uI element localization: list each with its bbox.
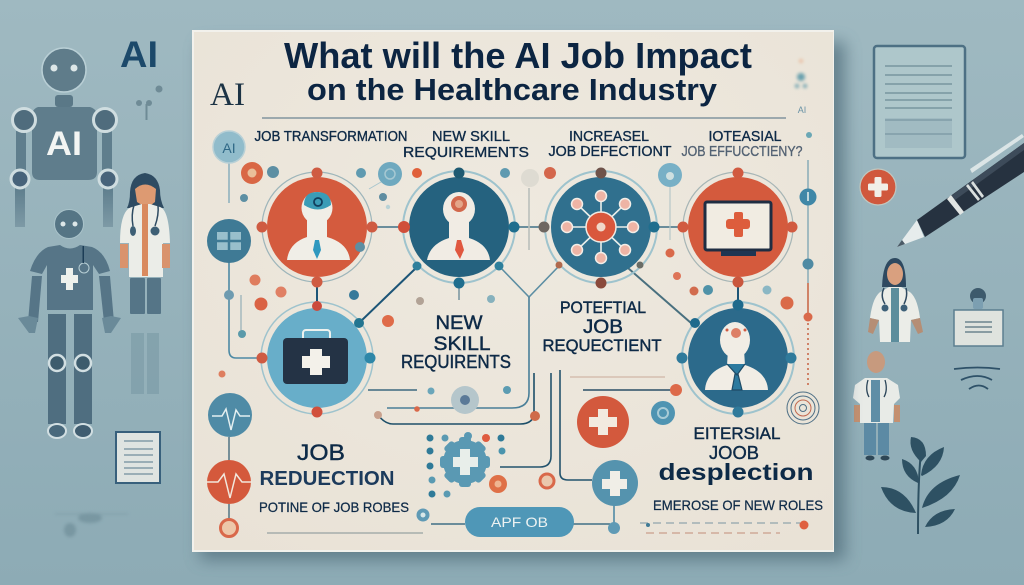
label: faint AI (panel right): AI xyxy=(798,105,806,115)
title: on the Healthcare Industry xyxy=(307,72,718,107)
label: AI (panel corner): AI xyxy=(210,77,245,113)
title xyxy=(284,35,752,107)
title: What will the AI Job Impact xyxy=(284,35,752,76)
network connectors xyxy=(229,160,808,533)
label: potential job desplection: JOOB xyxy=(709,443,759,463)
label: potential job desplection: EMEROSE OF NEW ROLES xyxy=(653,497,823,513)
icon: signal arcs xyxy=(954,368,1000,389)
icon: spiral target xyxy=(787,392,819,424)
label: new skill requirements xyxy=(401,313,511,372)
pill button: APP OB: APF OB xyxy=(491,514,548,530)
column headings: JOB EFFUCCTIENY? xyxy=(682,144,802,160)
label: potential job requirement: POTEFTIAL xyxy=(560,298,646,317)
right illustration column xyxy=(853,46,1024,534)
icon: blue ring node xyxy=(651,401,675,425)
circle: medical briefcase xyxy=(256,301,376,418)
label: job reduction xyxy=(259,440,409,515)
label: new skill requirements: NEW xyxy=(436,313,483,334)
icon: ID card with portrait xyxy=(954,288,1003,346)
icon: heartbeat blue xyxy=(208,393,252,437)
label: potential job desplection xyxy=(653,425,823,513)
doctor figure, upper right xyxy=(868,258,923,342)
column headings: IOTEASIAL xyxy=(708,129,782,145)
circle: dark blue person xyxy=(676,300,796,418)
icon: plant xyxy=(881,437,960,534)
pill button: APP OB xyxy=(416,507,574,537)
icon: gear with medical cross xyxy=(426,432,507,498)
column headings: JOB DEFECTIONT xyxy=(548,144,672,160)
circle: increased job defection xyxy=(538,168,660,288)
column headings: NEW SKILL xyxy=(432,129,510,145)
label: job reduction: JOB xyxy=(297,440,345,465)
main paper panel xyxy=(192,30,834,552)
robot figure with AI chest: AI xyxy=(46,125,82,163)
icon: heartbeat red xyxy=(206,460,252,504)
column headings: INCREASEL xyxy=(569,129,649,145)
icon: document, right xyxy=(874,46,965,158)
divider rule xyxy=(262,117,786,119)
doctor figure, lower right xyxy=(853,351,900,460)
icon: pen xyxy=(897,134,1024,247)
small teal dot xyxy=(806,132,812,138)
circle: new skill requirements xyxy=(398,168,520,288)
label: potential job desplection: desplection xyxy=(658,459,814,485)
label: potential job requirement: JOB xyxy=(583,317,623,338)
icon: document, left xyxy=(116,432,160,483)
icon: faint stethoscope mark xyxy=(136,86,162,120)
icon: small orange ring xyxy=(540,474,554,488)
column headings xyxy=(254,129,802,161)
robot figure with AI chest xyxy=(11,48,117,227)
label: AI (left background): AI xyxy=(120,34,158,75)
label: new skill requirements: REQUIRENTS xyxy=(401,352,511,372)
label: job reduction: POTINE OF JOB ROBES xyxy=(259,499,409,515)
label: potential job requirement: REQUECTIENT xyxy=(542,336,662,355)
small network nodes: AI xyxy=(222,140,236,156)
column headings: REQUIREMENTS xyxy=(403,145,529,161)
label: potential job requirement xyxy=(542,298,662,355)
icon: ring node xyxy=(220,520,238,536)
icon: blue plus circle xyxy=(592,460,638,534)
doctor figure, left xyxy=(120,173,170,394)
icon: red plus circle xyxy=(577,396,629,448)
label: job reduction: REDUECTION xyxy=(260,468,394,490)
humanoid figure with medical cross xyxy=(18,210,121,438)
label: new skill requirements: SKILL xyxy=(434,334,490,355)
small network nodes xyxy=(207,131,816,421)
left illustration column xyxy=(11,34,170,537)
icon: red medical badge xyxy=(860,169,896,205)
circle: potential job efficiency (monitor) xyxy=(678,168,798,288)
column headings: JOB TRANSFORMATION xyxy=(254,129,408,145)
circle: job transformation xyxy=(256,168,378,288)
icon: faint tool mark, bottom left xyxy=(55,513,128,537)
shadow behind panel xyxy=(200,42,845,560)
small orange marker with dot xyxy=(646,520,808,530)
faint icon, top right of panel xyxy=(795,59,807,88)
label: potential job desplection: EITERSIAL xyxy=(694,425,780,443)
